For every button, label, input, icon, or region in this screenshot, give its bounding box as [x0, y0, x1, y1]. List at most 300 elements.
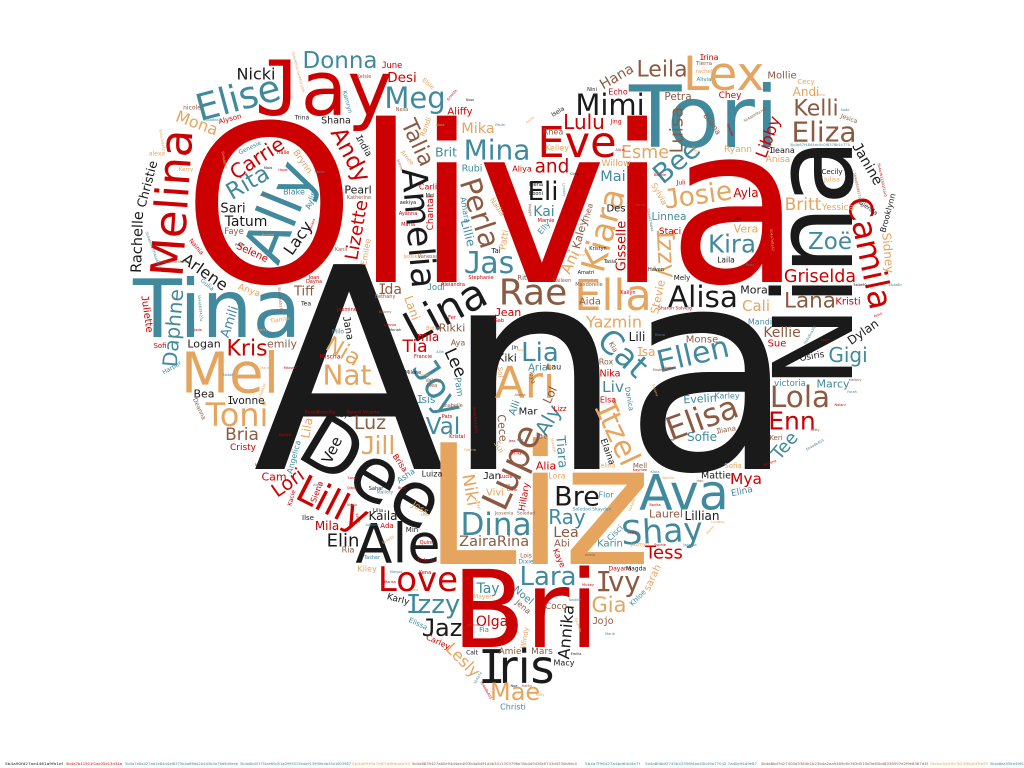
small names: upper left: Pearl [344, 184, 372, 196]
word: Lola: Lola [770, 380, 830, 414]
small names: upper middle: Patti [498, 229, 512, 251]
tiny filler names: Adriana [308, 218, 316, 232]
footer id strings: 5b4a8fdbd3745b43356f4be45b49a77042 7ad0e94d9e87 [645, 762, 758, 766]
medium names: Elin [327, 530, 359, 552]
word: Val: Val [426, 414, 460, 440]
small names: upper middle: Tai [490, 247, 501, 255]
small names: upper left: Elsie [420, 77, 436, 91]
medium names: Daphne [158, 288, 188, 368]
tiny filler names: Paula [495, 123, 505, 127]
small names: upper left: Lillie [458, 218, 478, 248]
medium names: Lori [267, 464, 309, 502]
tiny filler names: Lindsay [711, 520, 725, 524]
tiny filler names: 5b4a8b [628, 497, 636, 512]
small names: upper left: Blake [283, 188, 305, 196]
tiny filler names: Marsha [284, 366, 296, 370]
tiny filler names: Alona [313, 483, 323, 487]
tiny filler names: Maggie [527, 203, 533, 217]
tiny filler names: Kira [517, 438, 523, 442]
small names: upper left: mia [417, 330, 439, 344]
tiny filler names: Cindy [570, 172, 580, 176]
small names: upper middle: Echo [608, 88, 628, 96]
medium names: Tee [767, 428, 803, 465]
small names: lower left: Luiza [422, 470, 442, 478]
tiny filler names: Nalani [834, 403, 846, 407]
tiny filler names: Lorna [635, 203, 645, 207]
tiny filler names: Brooke [262, 233, 274, 237]
tiny filler names [144, 51, 902, 700]
small names: upper right: Staci [659, 227, 681, 237]
small names: lower right: victoria [774, 379, 806, 389]
small names: lower left: Ivonne [227, 395, 265, 407]
word: Rae: Rae [499, 272, 567, 314]
word: Ella: Ella [574, 271, 652, 321]
small names: upper right: 5b4a87f4844ac0c0f8378b1c770 [790, 143, 851, 147]
tiny filler names: Han [696, 479, 704, 483]
small names: upper middle: Tasia [603, 259, 616, 265]
small names: lower right: Dixie [518, 558, 534, 566]
small names: lower right: Karley [714, 392, 740, 400]
word: Kelli: Kelli [793, 96, 839, 122]
small names: lower left: Joss [409, 500, 430, 518]
small names: upper middle: Jessenia [494, 510, 513, 516]
tiny filler names: 5b4a8b [888, 283, 902, 287]
small names: upper right: Sharon Solveig [658, 306, 692, 312]
small names: upper left: Carli [419, 182, 437, 192]
small names: upper left: Amee [399, 149, 415, 167]
medium names: Liv [602, 378, 624, 396]
tiny filler names: Juliana [466, 623, 479, 627]
small names: lower left: Kiley [357, 564, 377, 574]
word: Mina: Mina [464, 134, 530, 166]
tiny filler names: Amina [514, 393, 526, 397]
tiny filler names: Jacqueline Marisol [158, 260, 191, 264]
small names: upper middle: Des [606, 204, 626, 214]
small names: lower right: Flor [598, 490, 614, 500]
small names: upper left: Joan [308, 275, 319, 281]
small names: lower right: Lillian [685, 509, 719, 523]
small names: upper middle: Aliya [512, 164, 532, 174]
medium names: Mika [461, 121, 495, 137]
word: Ana: Ana [253, 209, 796, 536]
tiny filler names: Jess [508, 439, 516, 443]
small names: upper left: Amara [458, 196, 472, 224]
small names: upper middle: Alli [507, 399, 523, 417]
medium names: Niki [457, 472, 483, 508]
tiny filler names: Moriah [389, 328, 401, 332]
small names: lower left: Sahar [369, 486, 384, 492]
small names: lower left: Harper [161, 360, 183, 376]
small names: upper left: Gulia [199, 277, 215, 293]
small names: lower left: Cam [261, 470, 287, 484]
small names: upper left: June [382, 61, 402, 71]
medium names: Luz [354, 412, 386, 434]
tiny filler names: Marla [260, 366, 270, 370]
small names: lower left: Calt [466, 650, 479, 656]
small names: lower right: Marcy [816, 378, 850, 390]
small names: lower right: Fia [479, 626, 489, 634]
tiny filler names: Melany [849, 378, 861, 382]
small names: upper middle: Rit [517, 274, 527, 282]
small names: lower left: Siena [309, 480, 325, 504]
footer id strings: 5b4a89f9a7e87d8fddab34 [352, 762, 411, 766]
small names: upper right: Laila [717, 256, 735, 264]
small names: upper right: Yessica [821, 203, 854, 213]
medium names: Tia [401, 337, 428, 357]
small names: upper left: Francie [414, 354, 432, 360]
small names: upper middle: Isis [417, 394, 435, 406]
small names: upper left: Jasmine [336, 307, 357, 313]
small names: upper middle: Gab [494, 318, 504, 324]
tiny filler names: Greta [815, 93, 825, 97]
word: Andy: Andy [325, 123, 375, 187]
small names: upper middle: Isela [550, 105, 566, 119]
footer id strings: 5b4a90fd27ae4461a9fb1ef [5, 762, 64, 766]
tiny filler names: Eden [666, 438, 674, 442]
small names: upper left: Juliette [139, 295, 155, 333]
small names: lower left: Vee [318, 434, 346, 466]
small names: upper left: Alyson [218, 112, 242, 126]
tiny filler names: Noor [466, 98, 475, 102]
tiny filler names: 5b4a7b11501f1ac0 [876, 163, 888, 197]
small names: upper left: India [353, 133, 373, 159]
small names: upper middle: Mar [519, 406, 538, 418]
small names: upper middle: Kaley [570, 217, 590, 250]
footer id strings: 5b4a8839427a60e94d4ae4f03b4a8491d4b3411303796e35b4a9436c0743d4330b9dc0 [412, 762, 578, 766]
small names: upper left: Mea [427, 383, 437, 389]
small names: lower right: Coco [545, 602, 568, 612]
word: Lina: Lina [395, 268, 495, 352]
tiny filler names: Paris [746, 263, 754, 267]
small names: lower right: Mell [633, 462, 647, 470]
small names: lower right: Dayana [608, 566, 632, 572]
tiny filler names: Margot [390, 570, 403, 574]
small names: upper right: Mora [740, 284, 768, 296]
small names: upper middle: Jean [495, 306, 521, 318]
tiny filler names: Jenny [574, 253, 585, 257]
small names: lower right: Evelin [683, 392, 717, 406]
footer id strings: 5b4a7e8a427ad1e84d4af8375b4a86da2b4d3b4a76d9d0eee [125, 762, 239, 766]
word: Ally: Ally [231, 152, 329, 272]
small names: upper middle: Aida [579, 296, 601, 308]
small names: lower left: Elissa [407, 616, 429, 632]
small names: lower right: Nika [600, 368, 620, 380]
medium names: Amili [218, 304, 242, 340]
small names: lower right: Mars [531, 647, 553, 657]
tiny filler names: Emilia [571, 652, 581, 656]
small names: upper right: Brooklynn [878, 192, 898, 234]
small names: lower left: Odessa [418, 558, 436, 564]
small names: lower left: emily [267, 338, 298, 350]
small names: upper left [134, 61, 819, 389]
word: Liz: Liz [424, 410, 651, 604]
tiny filler names: Leah [821, 338, 829, 342]
small names: upper left: Aleiandra [441, 282, 465, 288]
small names: upper left: Jessika [402, 254, 421, 260]
tiny filler names: Abby [691, 145, 699, 155]
medium names: Lea [553, 525, 579, 541]
word: Ellen: Ellen [653, 330, 733, 380]
tiny filler names: 5b4a8839 [257, 383, 267, 401]
word: Rita: Rita [222, 160, 274, 206]
word: Itzel: Itzel [587, 395, 647, 471]
small names: upper middle: Lucie [499, 474, 513, 480]
small names: lower right: Laurel [649, 508, 683, 520]
tiny filler names: Kiara [650, 470, 660, 474]
small names: lower right: Rox [599, 358, 614, 366]
small names: upper middle: Jae [535, 432, 548, 440]
small names: upper right: Haven [648, 267, 664, 273]
word: Talia: Talia [395, 115, 439, 170]
medium names: Yazmin [585, 312, 642, 332]
small names: lower left: Ria [342, 546, 354, 554]
tiny filler names: Bree [398, 486, 406, 490]
small names: lower left: Mallory [377, 490, 394, 496]
small names: upper left: Britta [426, 326, 440, 332]
small names: lower left: Cristy [230, 443, 257, 453]
small names: lower right: Christi [500, 702, 526, 712]
tiny filler names: Kaelyn [279, 433, 291, 437]
word: Jaz: Jaz [422, 614, 462, 642]
small names: lower left: Ada [380, 522, 394, 530]
medium names: Sari [220, 202, 246, 216]
small names: lower right: Jena [513, 597, 533, 616]
tiny filler names: 5b4a8839 [220, 151, 228, 169]
small names: upper right: Cecily [821, 168, 843, 176]
tiny filler names: Keira [421, 513, 429, 517]
small names: upper middle: Kristyn [589, 246, 607, 252]
small names: upper right: Glenda [857, 199, 879, 217]
word: Eliza: Eliza [791, 116, 857, 148]
footer id strings: 5b4a8b4037f4ae60d51a0995015b4a9139f0fe4b35d1603987 [240, 762, 352, 766]
small names: upper left: Nesa [396, 107, 408, 113]
word: Lana: Lana [784, 288, 836, 314]
word: Dina: Dina [460, 507, 532, 543]
word: Mel: Mel [181, 342, 279, 406]
word: Shay: Shay [620, 509, 704, 553]
tiny filler names: Hope [278, 168, 288, 172]
small names: lower left: Kena [419, 570, 431, 576]
tiny filler names: Raven [315, 170, 325, 174]
small names: upper middle: Mamie [538, 218, 554, 224]
tiny filler names: Susana [651, 383, 659, 397]
tiny filler names: Caela [507, 488, 517, 492]
small names: upper right: rachel [695, 69, 713, 75]
tiny filler names: 5b4a8ea3 [203, 118, 221, 122]
small names: lower left: Deanna [191, 397, 207, 421]
tiny filler names: Lesly [628, 531, 636, 535]
small names: upper middle: Nadia [488, 196, 506, 218]
small names: lower right: Khloe [628, 588, 648, 608]
tiny filler names: 5b4a89 [381, 535, 395, 545]
small names: lower right: Sue [768, 338, 786, 350]
small names: upper left: Brit [435, 144, 457, 160]
tiny filler names: Tory [515, 348, 524, 352]
small names: upper middle: Soledad [517, 510, 535, 516]
medium names: Lesly [442, 639, 484, 681]
word: Izzy (right): Izzy [651, 227, 681, 279]
tiny filler names: Alessia [384, 323, 396, 327]
small names: upper right: Mandi [748, 318, 772, 326]
small names: lower right: Noel [511, 585, 535, 607]
small names: lower right: Mattie [701, 470, 731, 482]
medium names: Lilly [289, 466, 377, 540]
small names: lower left: Mila [315, 519, 339, 533]
tiny filler names: Ashlyn [474, 499, 482, 511]
small names: upper middle: Kiki [497, 352, 517, 364]
small names: upper middle: Amatri [578, 270, 594, 276]
word: Iris: Iris [478, 640, 554, 694]
medium names: Tay [475, 581, 500, 597]
medium names: Rina [497, 534, 529, 550]
footer id strings: 5b4a7b11501f1ac05e13d34a [66, 762, 122, 766]
small names: lower right: Keri [769, 434, 783, 442]
small names: lower left: Sanjuli Vicente [346, 410, 380, 416]
tiny filler names: Jeanne [396, 158, 404, 171]
word: Jill: Jill [361, 430, 395, 460]
small names: upper right: Jesica [839, 112, 859, 125]
small names: upper right: Julisa [823, 176, 840, 184]
tiny filler names: Adeline [365, 523, 379, 527]
small names: upper middle: Lili [629, 330, 645, 344]
medium names: Mai [600, 169, 626, 185]
small names: lower left: Karly [386, 592, 411, 608]
tiny filler names: Maia [264, 166, 272, 170]
small names: lower left: Lilia [373, 508, 383, 514]
tiny filler names: Jada [711, 220, 720, 224]
small names: upper left: Selene [234, 241, 270, 265]
medium names: Tiff [293, 284, 315, 300]
small names: upper middle: Willow [601, 159, 631, 169]
word: Jay: Jay [255, 44, 392, 133]
small names: lower right: Karin [597, 538, 623, 550]
small names: upper middle: Lau [547, 362, 561, 372]
tiny filler names: Sandra [662, 476, 674, 480]
small names: upper left: Kelsie [357, 74, 371, 80]
small names: upper left: Ayla [733, 186, 759, 200]
small names: upper left: Aya [451, 338, 465, 348]
small names: upper middle: Maxdorelle [575, 282, 603, 288]
small names: upper left: Milene [405, 370, 421, 376]
tiny filler names: 5b4a9 [419, 373, 431, 377]
word: Cat: Cat [590, 321, 656, 385]
tiny filler names: Bonita [649, 503, 661, 507]
small names: upper right: Ileana [769, 146, 795, 154]
tiny filler names: Ximena [763, 459, 777, 467]
tiny filler names: Qiana [347, 486, 357, 490]
medium names: Lulu [563, 110, 605, 134]
small names: upper left: Bethany [375, 294, 395, 300]
small names: upper left: Trina [294, 114, 310, 122]
tiny filler names: Alexa [705, 525, 715, 535]
small names: upper right: Linnea [652, 211, 686, 223]
tiny filler names: Alma [436, 123, 444, 127]
small names: lower left: Kacie [287, 489, 298, 507]
tiny filler names: Paige [235, 243, 245, 247]
small names: lower right: Elsa [600, 396, 616, 404]
word: Ava: Ava [639, 464, 729, 522]
small names: lower left: Mischa [320, 354, 341, 360]
small names: lower left: Ilse [302, 514, 314, 522]
medium names: and [535, 156, 569, 178]
tiny filler names: 5b4a7e [473, 671, 483, 685]
small names: upper left: Andi [793, 85, 819, 99]
small names: upper middle [417, 87, 692, 516]
word: Nina: Nina [750, 138, 878, 388]
small names: upper left: Shana [321, 116, 351, 126]
word: Lupe: Lupe [474, 417, 550, 517]
small names: lower right: Sofia [724, 462, 742, 470]
small names: lower right [473, 334, 850, 712]
tiny filler names: Kathy [522, 684, 532, 688]
medium names: Olga [476, 614, 508, 630]
small names: upper middle: Kristal [449, 434, 465, 440]
small names: upper right: Eliana [701, 111, 723, 137]
tiny filler names: 5b4a89f9a7e8 [743, 107, 767, 123]
word: Lia: Lia [521, 338, 559, 368]
small names: upper left: aekiya [400, 200, 416, 206]
medium names: Tatum [224, 214, 267, 230]
small names: lower right: Iliana [715, 424, 737, 436]
tiny filler names: Marie [605, 632, 615, 636]
tiny filler names: 5b4a8ea3f0 [803, 325, 817, 345]
tiny filler names: 5b4a8b [371, 93, 381, 107]
small names: upper left: Halie [277, 150, 289, 156]
medium names: Tess [644, 542, 683, 564]
tiny filler names: 5b4a8 [222, 373, 234, 377]
word: Zoe: Zoë [808, 229, 852, 255]
tiny filler names: Aisha [525, 115, 535, 125]
word: Elisa: Elisa [661, 387, 743, 449]
word: Josie: Josie [662, 175, 734, 215]
medium names: Kai [533, 204, 555, 220]
small names: upper left: Fer [448, 315, 457, 321]
small names: upper right: Vera [734, 222, 758, 236]
small names: lower right: Kaye [551, 547, 567, 569]
small names: upper right: Mollie [767, 70, 797, 82]
tiny filler names: 5b4a89f [550, 438, 556, 453]
word: Dee: Dee [285, 396, 459, 548]
medium names: Luisa [666, 107, 688, 153]
small names: upper left: Chantal [426, 196, 436, 230]
small names: lower right: Macy [554, 658, 575, 668]
small names: upper right: Sidney [879, 232, 897, 274]
small names: upper left: Anya [237, 282, 261, 300]
small names: upper left: Mei [426, 193, 434, 199]
small names: upper middle: Jing [609, 118, 622, 126]
small names: upper left: Kamryn [341, 90, 353, 114]
tiny filler names: Hailey [257, 328, 267, 332]
tiny filler names: Baileey [379, 310, 391, 314]
tiny filler names: 5b4a8b4037f4ae60d5 [144, 231, 162, 269]
word: Toni: Toni [205, 396, 268, 434]
small names: upper left: Vanessa [418, 254, 438, 260]
footer id strings: 5b4a8bd7d27404d3384b1b23b4a2aa9469c6c363d510d3e65b48036597e2f9e8387d4f [761, 762, 929, 766]
small names: upper middle: Pats [442, 414, 453, 420]
word: Bri: Bri [452, 549, 599, 673]
tiny filler names: Kayla [354, 513, 362, 523]
word: Gia: Gia [592, 593, 626, 617]
small names: lower left: Quinn [420, 540, 434, 546]
small names: lower right: Sofie [687, 430, 717, 444]
small names: upper middle: Anabelle [441, 403, 463, 409]
small names: upper middle: Petra [664, 91, 692, 103]
tiny filler names: Farah [847, 390, 857, 394]
word: Bre: Bre [554, 482, 600, 512]
word: Jas: Jas [464, 246, 514, 280]
small names: lower right: Magda [626, 566, 646, 572]
footer id strings: 5b4a7f96427a4bd64d4e7f [585, 762, 641, 766]
